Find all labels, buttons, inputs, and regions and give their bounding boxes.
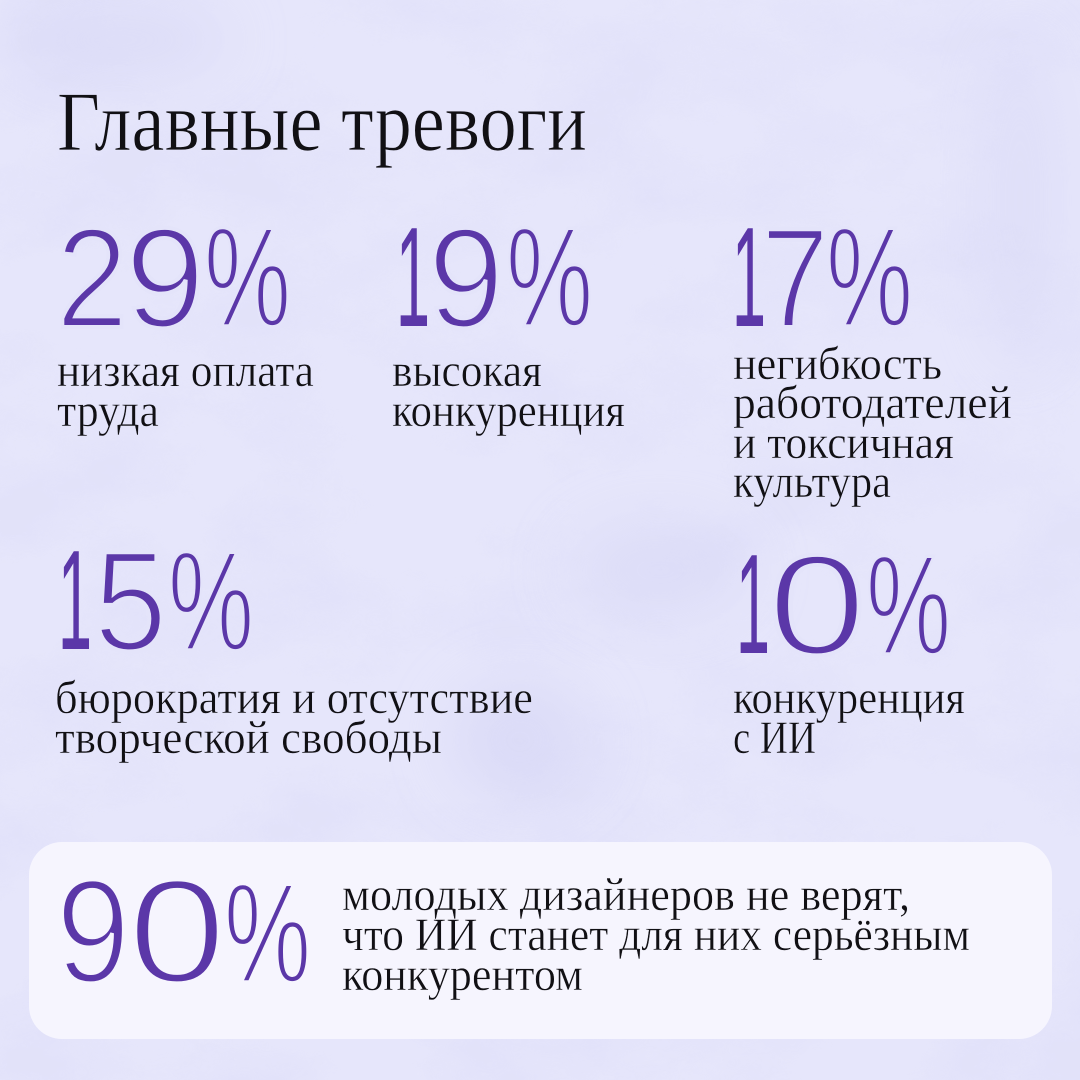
number: 90%: % bbox=[224, 854, 311, 1013]
number: 29%: 2 bbox=[56, 199, 128, 358]
number: 17%: 1 bbox=[732, 198, 766, 357]
number: 19%: 9 bbox=[428, 199, 504, 358]
number: 90%: 0 bbox=[128, 850, 226, 1014]
label: bureaucracy and lack of creative freedom bbox=[55, 672, 533, 764]
number: 19% bbox=[396, 198, 593, 358]
label: high competition bbox=[392, 345, 625, 437]
label: inflexible employers and toxic culture: культура bbox=[733, 456, 891, 508]
number: 17%: % bbox=[826, 198, 913, 357]
stat: 15% bureaucracy bbox=[55, 521, 533, 764]
label: inflexible employers and toxic culture bbox=[733, 338, 1012, 508]
stat: 17% inflexible employers bbox=[732, 198, 1012, 508]
label: low pay bbox=[57, 345, 314, 437]
number: 29%: % bbox=[204, 198, 291, 357]
number: 19%: % bbox=[506, 198, 593, 357]
number: 10%: 1 bbox=[736, 525, 770, 684]
number: 90% bbox=[56, 850, 311, 1014]
number: 10%: 0 bbox=[768, 526, 866, 685]
label: inflexible employers and toxic culture: негибкость bbox=[733, 338, 942, 390]
stat: 19% high competition bbox=[392, 198, 625, 437]
number: 15% bbox=[58, 521, 254, 681]
callout text: молодых дизайнеров не верят, bbox=[342, 869, 910, 921]
stat: 29% low pay bbox=[56, 198, 314, 437]
number: 15%: % bbox=[168, 522, 254, 681]
label: low pay: труда bbox=[57, 385, 159, 437]
label: high competition: высокая bbox=[392, 345, 542, 397]
label: low pay: низкая оплата bbox=[57, 345, 314, 397]
label: competition with AI: конкуренция bbox=[733, 672, 965, 724]
label: competition with AI bbox=[733, 672, 965, 764]
number: 10% bbox=[736, 525, 951, 685]
callout text: что ИИ станет для них серьёзным bbox=[342, 909, 970, 961]
stat: 10% competition with AI bbox=[733, 525, 965, 764]
number: 10%: % bbox=[866, 526, 951, 685]
number: 19%: 1 bbox=[396, 198, 430, 357]
callout text bbox=[342, 869, 970, 1001]
number: 17%: 7 bbox=[761, 199, 829, 358]
number: 29% bbox=[56, 198, 291, 358]
number: 17% bbox=[732, 198, 913, 358]
title: Главные тревоги bbox=[57, 75, 587, 169]
number: 29%: 9 bbox=[125, 199, 205, 358]
label: inflexible employers and toxic culture: работодателей bbox=[733, 377, 1012, 429]
label: bureaucracy and lack of creative freedom: творческой свободы bbox=[55, 712, 442, 764]
callout text: конкурентом bbox=[342, 949, 583, 1001]
label: competition with AI: с ИИ bbox=[733, 712, 816, 764]
label: bureaucracy and lack of creative freedom: бюрократия и отсутствие bbox=[55, 672, 533, 724]
number: 90%: 9 bbox=[56, 850, 130, 1014]
label: high competition: конкуренция bbox=[392, 385, 625, 437]
label: inflexible employers and toxic culture: и токсичная bbox=[733, 417, 954, 469]
number: 15%: 1 bbox=[58, 521, 92, 680]
number: 15%: 5 bbox=[94, 522, 167, 681]
panel: 90% callout bbox=[29, 842, 1052, 1039]
